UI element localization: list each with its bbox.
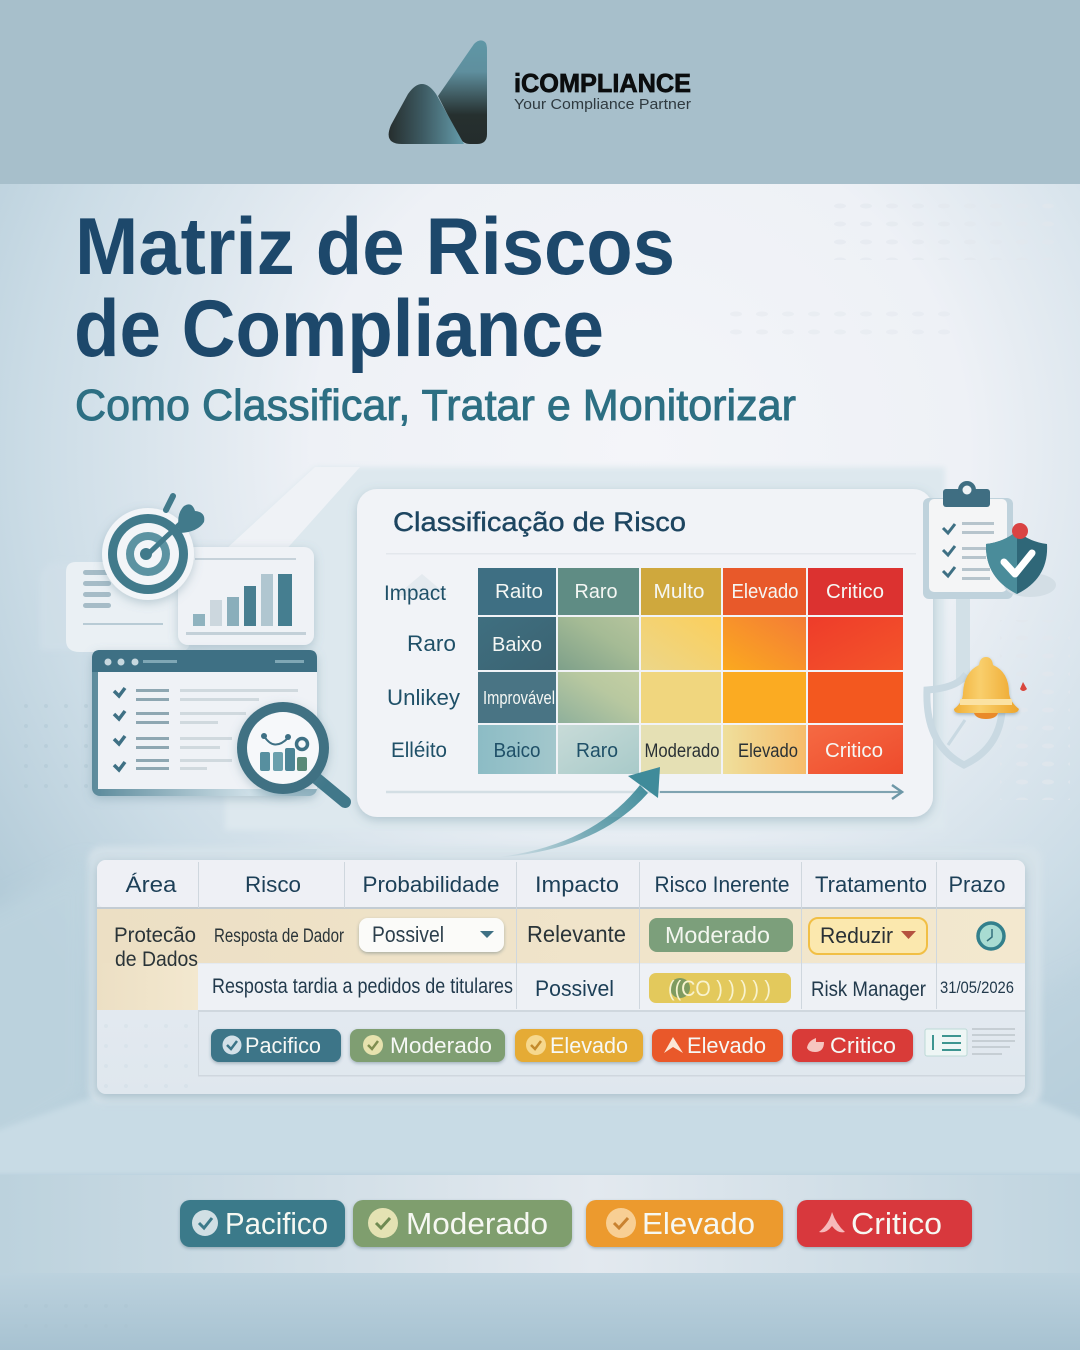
legend: Elevado: Elevado: [642, 1206, 755, 1241]
table row text: Risk Manager: [811, 978, 926, 1001]
table row text: Possivel: [535, 976, 614, 1001]
matrix grid: Baixo: [492, 634, 542, 656]
dropdown: Possivel: [359, 918, 504, 952]
table beige rows: [97, 909, 1025, 1092]
arrow: from table to matrix: [490, 767, 660, 858]
matrix grid: Multo: [654, 581, 704, 603]
matrix row labels: [384, 574, 460, 762]
subtitle: Como Classificar, Tratar e Monitorizar: [75, 381, 796, 430]
title: [74, 202, 675, 374]
matrix grid: Baico: [494, 740, 540, 762]
dropdown: Reduzir: Reduzir: [820, 923, 893, 948]
badge: Moderado: Moderado: [665, 922, 770, 948]
panel: risk register table: [97, 860, 1025, 1094]
legend: Critico: [797, 1200, 972, 1247]
table grid lines: [97, 862, 1025, 1076]
title: Matriz de Riscos: [75, 202, 675, 292]
logo wordmark: iCOMPLIANCE: [514, 68, 691, 98]
icon: clock: [978, 923, 1004, 949]
obscured risk badge: ((CO ) ) ) ) ): [668, 976, 771, 1001]
matrix row labels: Raro: [407, 631, 456, 656]
pill: Critico: [792, 1029, 913, 1062]
dropdown: Reduzir: [809, 918, 927, 954]
matrix row labels: Impact: [384, 582, 446, 605]
table row text: de Dados: [115, 948, 198, 971]
connector bar: [956, 599, 970, 679]
legend: Moderado: [353, 1200, 572, 1247]
legend: Moderado: Moderado: [406, 1206, 548, 1241]
logo mark: [389, 40, 487, 144]
panel: risk classification matrix: [357, 489, 933, 817]
bar chart card: [178, 547, 314, 645]
logo tagline: Your Compliance Partner: [514, 96, 691, 113]
logo: iCompliance: [389, 40, 691, 144]
matrix grid: Raro: [576, 740, 618, 762]
table row text: 31/05/2026: [940, 978, 1014, 997]
matrix grid: Elevado: [738, 741, 798, 762]
legend: Pacifico: [180, 1200, 345, 1247]
table row text: Relevante: [527, 921, 626, 947]
table header text: Risco Inerente: [654, 872, 790, 897]
dropdown: Possivel: Possivel: [372, 922, 444, 947]
matrix grid: Critico: [826, 581, 884, 603]
matrix axis arrow: [386, 785, 902, 799]
icon: target with dart: [102, 496, 204, 600]
table header text: Risco: [245, 872, 301, 897]
legend: Critico: Critico: [851, 1206, 942, 1241]
table header text: Prazo: [948, 872, 1006, 897]
table header text: [126, 872, 1006, 897]
table row text: Resposta tardia a pedidos de titulares: [212, 975, 513, 998]
icon: faded shield: [927, 677, 1002, 765]
table header text: Probabilidade: [362, 872, 500, 897]
table row text: [114, 921, 1014, 1001]
legend: Pacifico: Pacifico: [225, 1206, 328, 1241]
matrix grid: Raito: [495, 581, 543, 603]
pill: Elevado alert: Elevado: [687, 1033, 766, 1058]
matrix grid: Moderado: [644, 741, 720, 762]
icon: clipboard with shield: [923, 481, 1056, 599]
pill: Pacifico: Pacifico: [245, 1033, 321, 1058]
table row text: Resposta de Dador: [214, 926, 345, 947]
matrix row labels: Elléito: [391, 739, 447, 762]
matrix grid: Raro: [574, 581, 618, 603]
legend pills: [180, 1200, 972, 1247]
pill: Critico: Critico: [830, 1033, 896, 1058]
table header text: Impacto: [535, 872, 619, 897]
pill: Moderado: [350, 1029, 505, 1062]
title: de Compliance: [74, 284, 604, 374]
matrix row labels: Unlikey: [387, 685, 460, 710]
matrix grid: Improvável: [483, 688, 555, 708]
badge: Moderado: [649, 918, 793, 952]
pill: Elevado: Elevado: [550, 1033, 628, 1058]
document panel: [66, 562, 190, 652]
matrix grid: Critico: [825, 740, 883, 762]
matrix grid: [478, 568, 903, 774]
pill: Elevado alert: [652, 1029, 783, 1062]
icon: alert bell: [954, 657, 1027, 719]
heading: Classificação de Risco: Classificação de Risco: [393, 507, 686, 537]
icon: list: [925, 1028, 1015, 1056]
table row text: Protecão: [114, 924, 196, 947]
illustration: analytics dashboard: [66, 496, 345, 802]
table header text: Tratamento: [815, 872, 927, 897]
legend: Elevado: [586, 1200, 783, 1247]
browser window checklist: [92, 650, 317, 796]
header band: [0, 0, 1080, 184]
pill: Pacifico: [211, 1029, 341, 1062]
pill: Elevado: [515, 1029, 643, 1062]
table header text: Área: [126, 872, 177, 897]
matrix grid: Elevado: [732, 581, 798, 603]
obscured risk badge: [649, 973, 791, 1003]
pill: Moderado: Moderado: [390, 1033, 492, 1058]
icon: magnifying glass: [237, 702, 345, 802]
status pills row: [211, 1029, 913, 1062]
